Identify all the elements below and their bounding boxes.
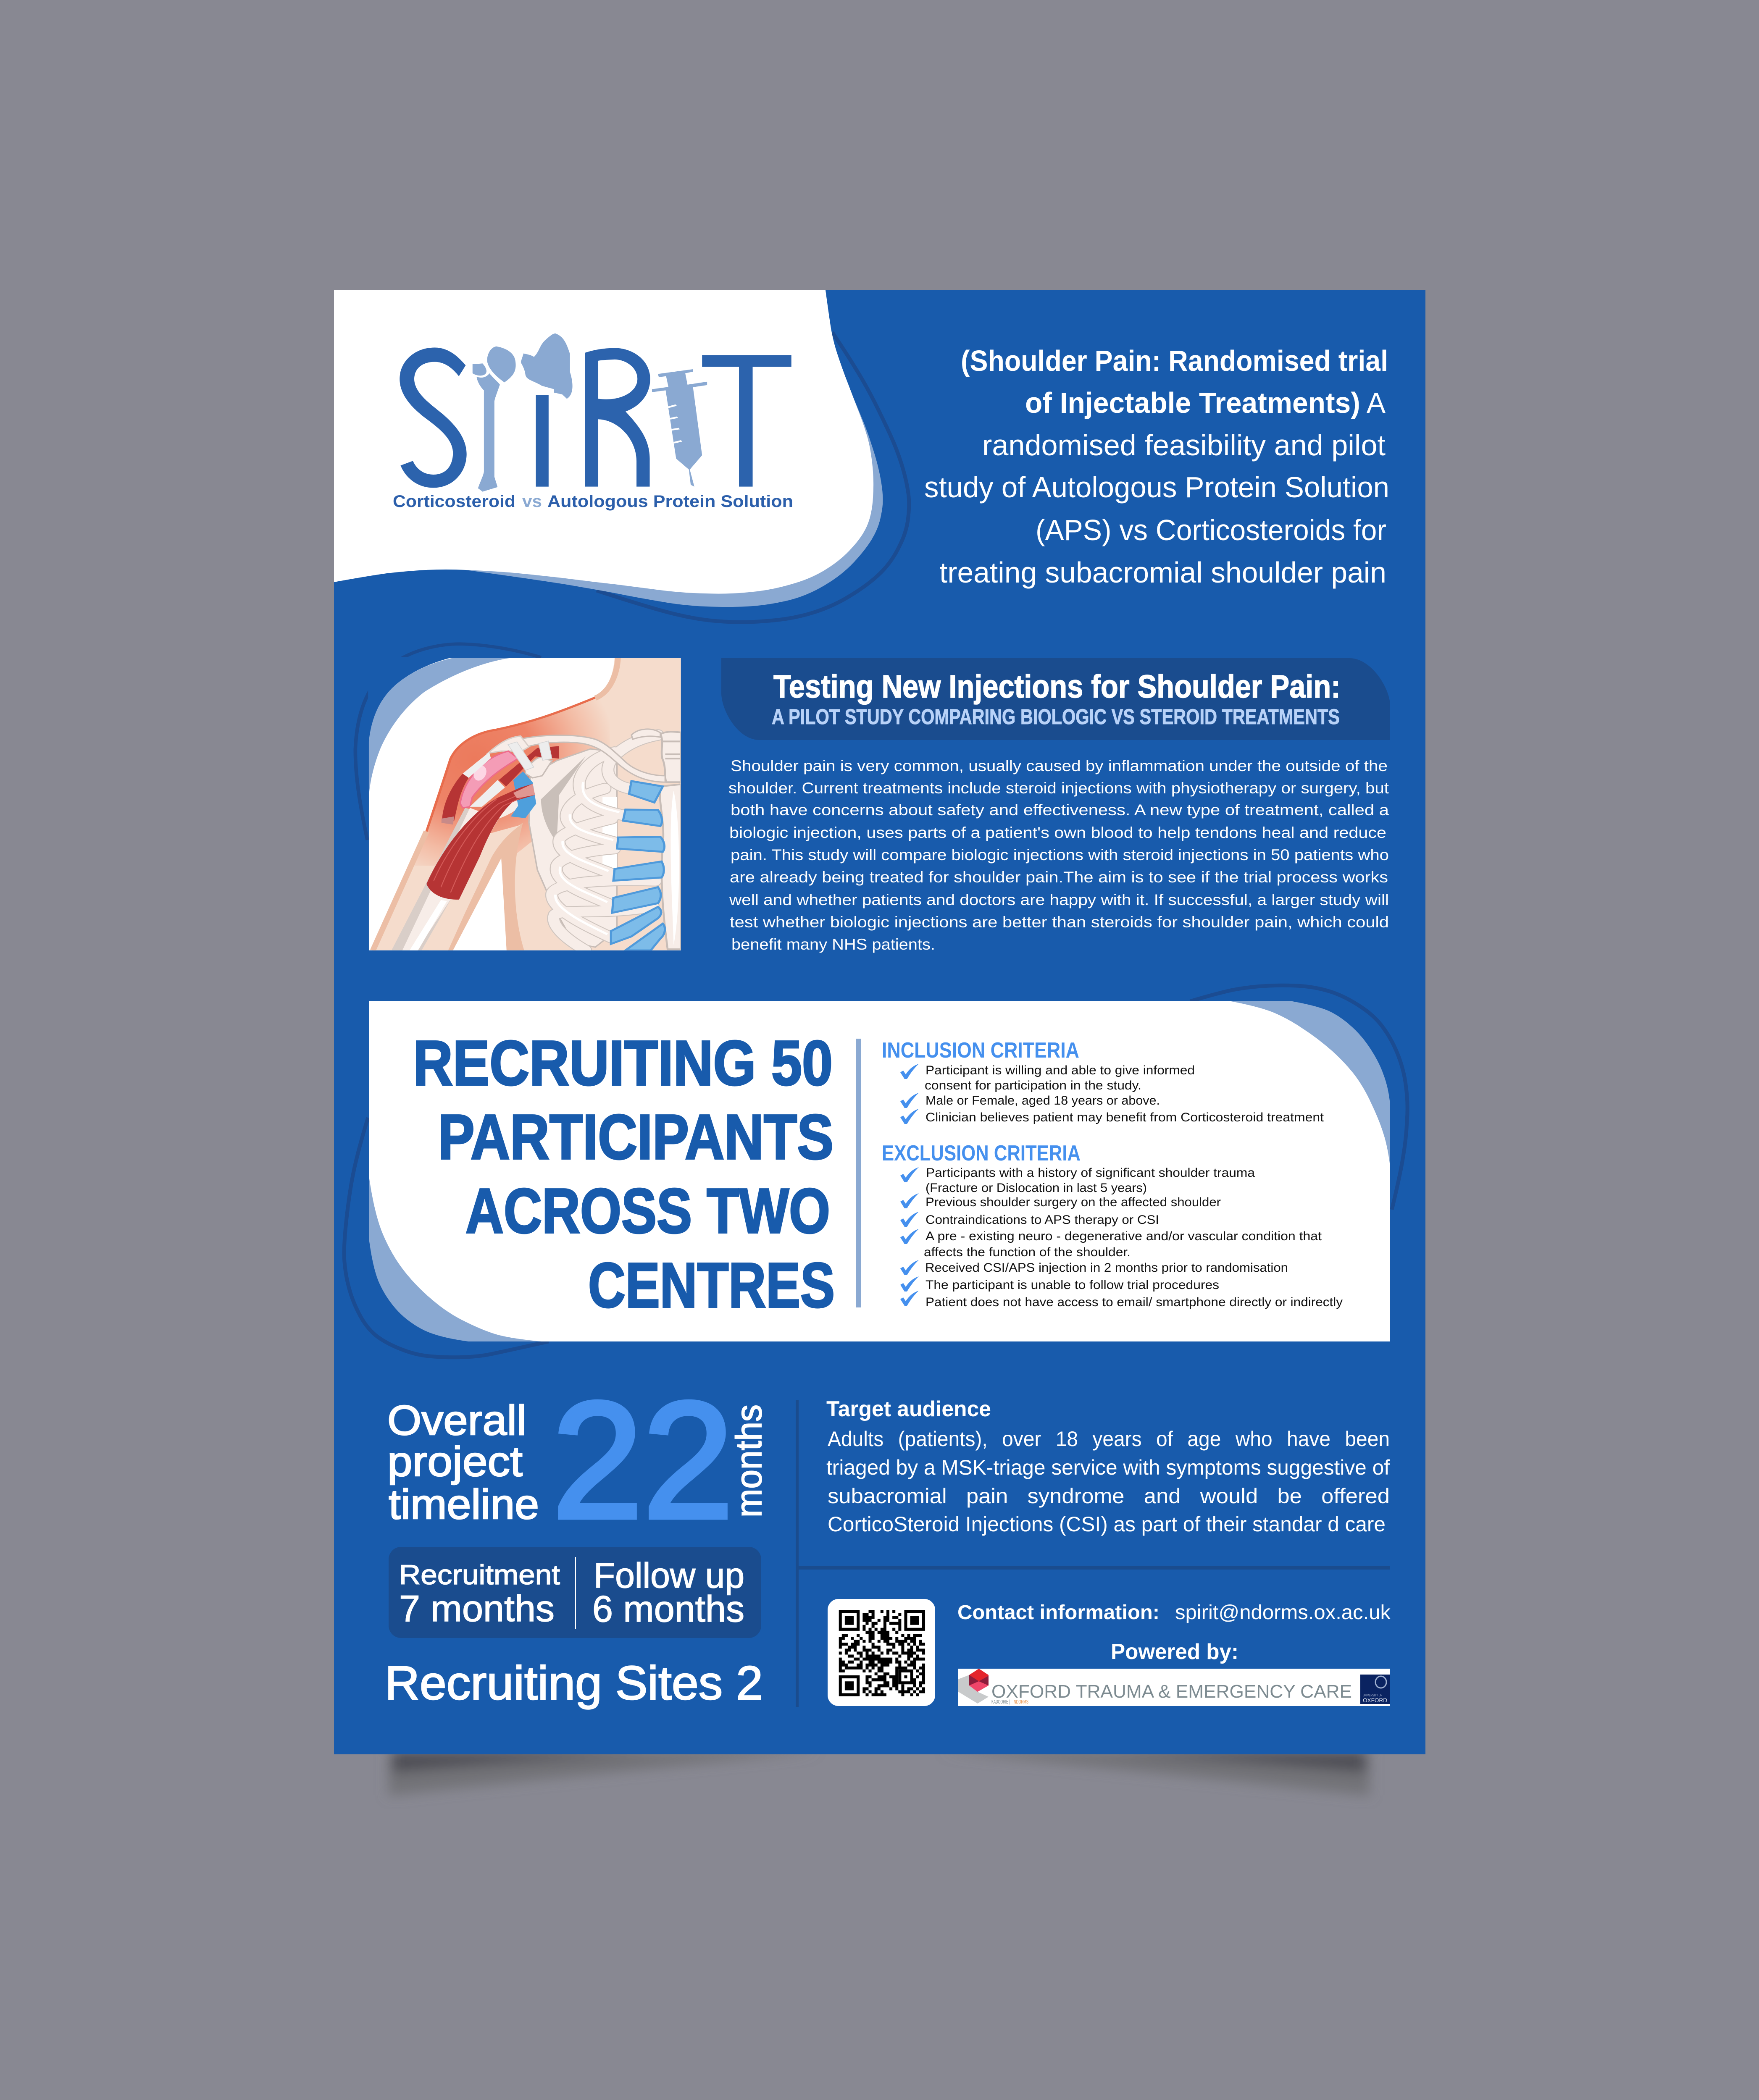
overall project timeline label (387, 1397, 539, 1528)
University of Oxford crest (1360, 1675, 1390, 1704)
recruitment headline: RECRUITING 50 (413, 1027, 833, 1098)
exclusion criteria list: A pre - existing neuro - degenerative and/or vascular condition that (926, 1229, 1322, 1243)
exclusion criteria list: Contraindications to APS therapy or CSI (926, 1213, 1159, 1227)
exclusion criteria list: Patient does not have access to email/ smartphone directly or indirectly (926, 1295, 1343, 1309)
exclusion criteria list: affects the function of the shoulder. (924, 1245, 1131, 1259)
exclusion criteria list: (Fracture or Dislocation in last 5 years) (926, 1181, 1147, 1195)
exclusion criteria list: The participant is unable to follow trial procedures (926, 1278, 1219, 1292)
header description text: randomised feasibility and pilot (982, 429, 1386, 462)
header description text: (Shoulder Pain: Randomised trial (961, 344, 1388, 377)
logo tagline (393, 492, 793, 511)
study summary paragraph: benefit many NHS patients. (731, 936, 935, 953)
University of Oxford crest: OXFORD (1363, 1697, 1387, 1704)
target audience: Adults (patients), over 18 years of age who have been (828, 1427, 1390, 1451)
header description text: of Injectable Treatments) A (1025, 386, 1386, 419)
recruitment headline (413, 1027, 835, 1320)
target audience: Target audience (826, 1397, 991, 1421)
QR code (828, 1599, 935, 1706)
follow up duration: 6 months (592, 1588, 744, 1630)
header description text: treating subacromial shoulder pain (939, 556, 1386, 589)
banner subtitle: A PILOT STUDY COMPARING BIOLOGIC VS STEROID TREATMENTS (772, 705, 1340, 729)
recruitment duration: Recruitment (399, 1559, 560, 1590)
recruitment headline: ACROSS TWO (465, 1175, 830, 1246)
exclusion criteria heading: EXCLUSION CRITERIA (882, 1141, 1081, 1166)
target audience: CorticoSteroid Injections (CSI) as part of their standar d care (828, 1512, 1386, 1536)
rotated months label: months (729, 1404, 769, 1517)
study summary paragraph: are already being treated for shoulder pain.The aim is to see if the trial process works (730, 869, 1388, 886)
inclusion criteria list: Male or Female, aged 18 years or above. (926, 1094, 1160, 1108)
follow up duration: Follow up (594, 1556, 744, 1595)
logo tagline: Autologous Protein Solution (547, 492, 793, 511)
section dividers (796, 1400, 1390, 1707)
recruitment duration (399, 1559, 560, 1629)
contact information: spirit@ndorms.ox.ac.uk (1175, 1601, 1391, 1624)
inclusion criteria list: Participant is willing and able to give informed (926, 1063, 1195, 1077)
exclusion criteria list: Previous shoulder surgery on the affected shoulder (926, 1195, 1221, 1209)
logo tagline: Corticosteroid (393, 492, 515, 511)
poster background (334, 290, 1425, 1754)
inclusion criteria list: consent for participation in the study. (925, 1079, 1141, 1092)
header description text: study of Autologous Protein Solution (924, 471, 1389, 504)
exclusion criteria list: Received CSI/APS injection in 2 months prior to randomisation (925, 1261, 1288, 1275)
organisation name: OXFORD TRAUMA & EMERGENCY CARE (991, 1681, 1352, 1702)
header description text: (APS) vs Corticosteroids for (1036, 514, 1386, 546)
overall project timeline label: timeline (389, 1481, 539, 1528)
icons: check marks (900, 1064, 919, 1306)
icon: hexagon emblem (958, 1669, 989, 1704)
logo tagline: vs (522, 492, 542, 511)
department names: NDORMS (1014, 1698, 1028, 1705)
overall project timeline label: project (387, 1438, 523, 1485)
study summary paragraph: biologic injection, uses parts of a patient's own blood to help tendons heal and reduce (729, 824, 1386, 841)
contact information: Contact information: (957, 1601, 1160, 1624)
overall project timeline label: Overall (387, 1397, 526, 1444)
panel: recruitment and follow up durations (389, 1547, 761, 1638)
study summary paragraph: pain. This study will compare biologic injections with steroid injections in 50 patients who (731, 846, 1389, 864)
study summary paragraph: test whether biologic injections are better than steroids for shoulder pain, which could (730, 914, 1389, 931)
University of Oxford crest: UNIVERSITY OF (1363, 1693, 1382, 1697)
recruitment duration: 7 months (399, 1588, 555, 1629)
panel divider (856, 1039, 861, 1307)
inclusion criteria heading: INCLUSION CRITERIA (882, 1038, 1079, 1063)
header description text (924, 344, 1389, 589)
banner title: Testing New Injections for Shoulder Pain: (773, 669, 1341, 705)
panel: study heading banner (721, 658, 1390, 740)
poster drop shadow (389, 1751, 1370, 1796)
powered by label: Powered by: (1111, 1640, 1238, 1664)
follow up duration (592, 1556, 744, 1630)
recruitment headline: PARTICIPANTS (438, 1101, 833, 1172)
inclusion criteria list (925, 1063, 1324, 1124)
department names: KADOORIE | (991, 1698, 1010, 1705)
inclusion criteria list: Clinician believes patient may benefit from Corticosteroid treatment (926, 1110, 1324, 1124)
panel: recruitment and criteria (344, 985, 1407, 1357)
target audience (826, 1397, 1390, 1536)
study summary paragraph (728, 757, 1389, 953)
target audience: triaged by a MSK-triage service with symptoms suggestive of (826, 1456, 1390, 1479)
exclusion criteria list: Participants with a history of significant shoulder trauma (926, 1166, 1255, 1180)
panel: logo header wave (334, 290, 909, 622)
recruiting sites: Recruiting Sites 2 (385, 1656, 763, 1709)
study summary paragraph: both have concerns about safety and effectiveness. A new type of treatment, called a (731, 801, 1389, 819)
number: 22 months: 22 (552, 1367, 734, 1553)
study summary paragraph: Shoulder pain is very common, usually caused by inflammation under the outside of the (731, 757, 1388, 774)
recruitment headline: CENTRES (588, 1250, 835, 1320)
exclusion criteria list (924, 1166, 1343, 1309)
logo: Oxford Trauma and Emergency Care (958, 1669, 1390, 1706)
study summary paragraph: well and whether patients and doctors are happy with it. If successful, a larger study will (729, 891, 1389, 908)
target audience: subacromial pain syndrome and would be offered (828, 1484, 1390, 1508)
study summary paragraph: shoulder. Current treatments include steroid injections with physiotherapy or surgery, but (728, 780, 1389, 797)
logo: SPIRIT wordmark (393, 333, 793, 511)
contact information (957, 1601, 1391, 1624)
panel: shoulder anatomy illustration (355, 644, 681, 950)
